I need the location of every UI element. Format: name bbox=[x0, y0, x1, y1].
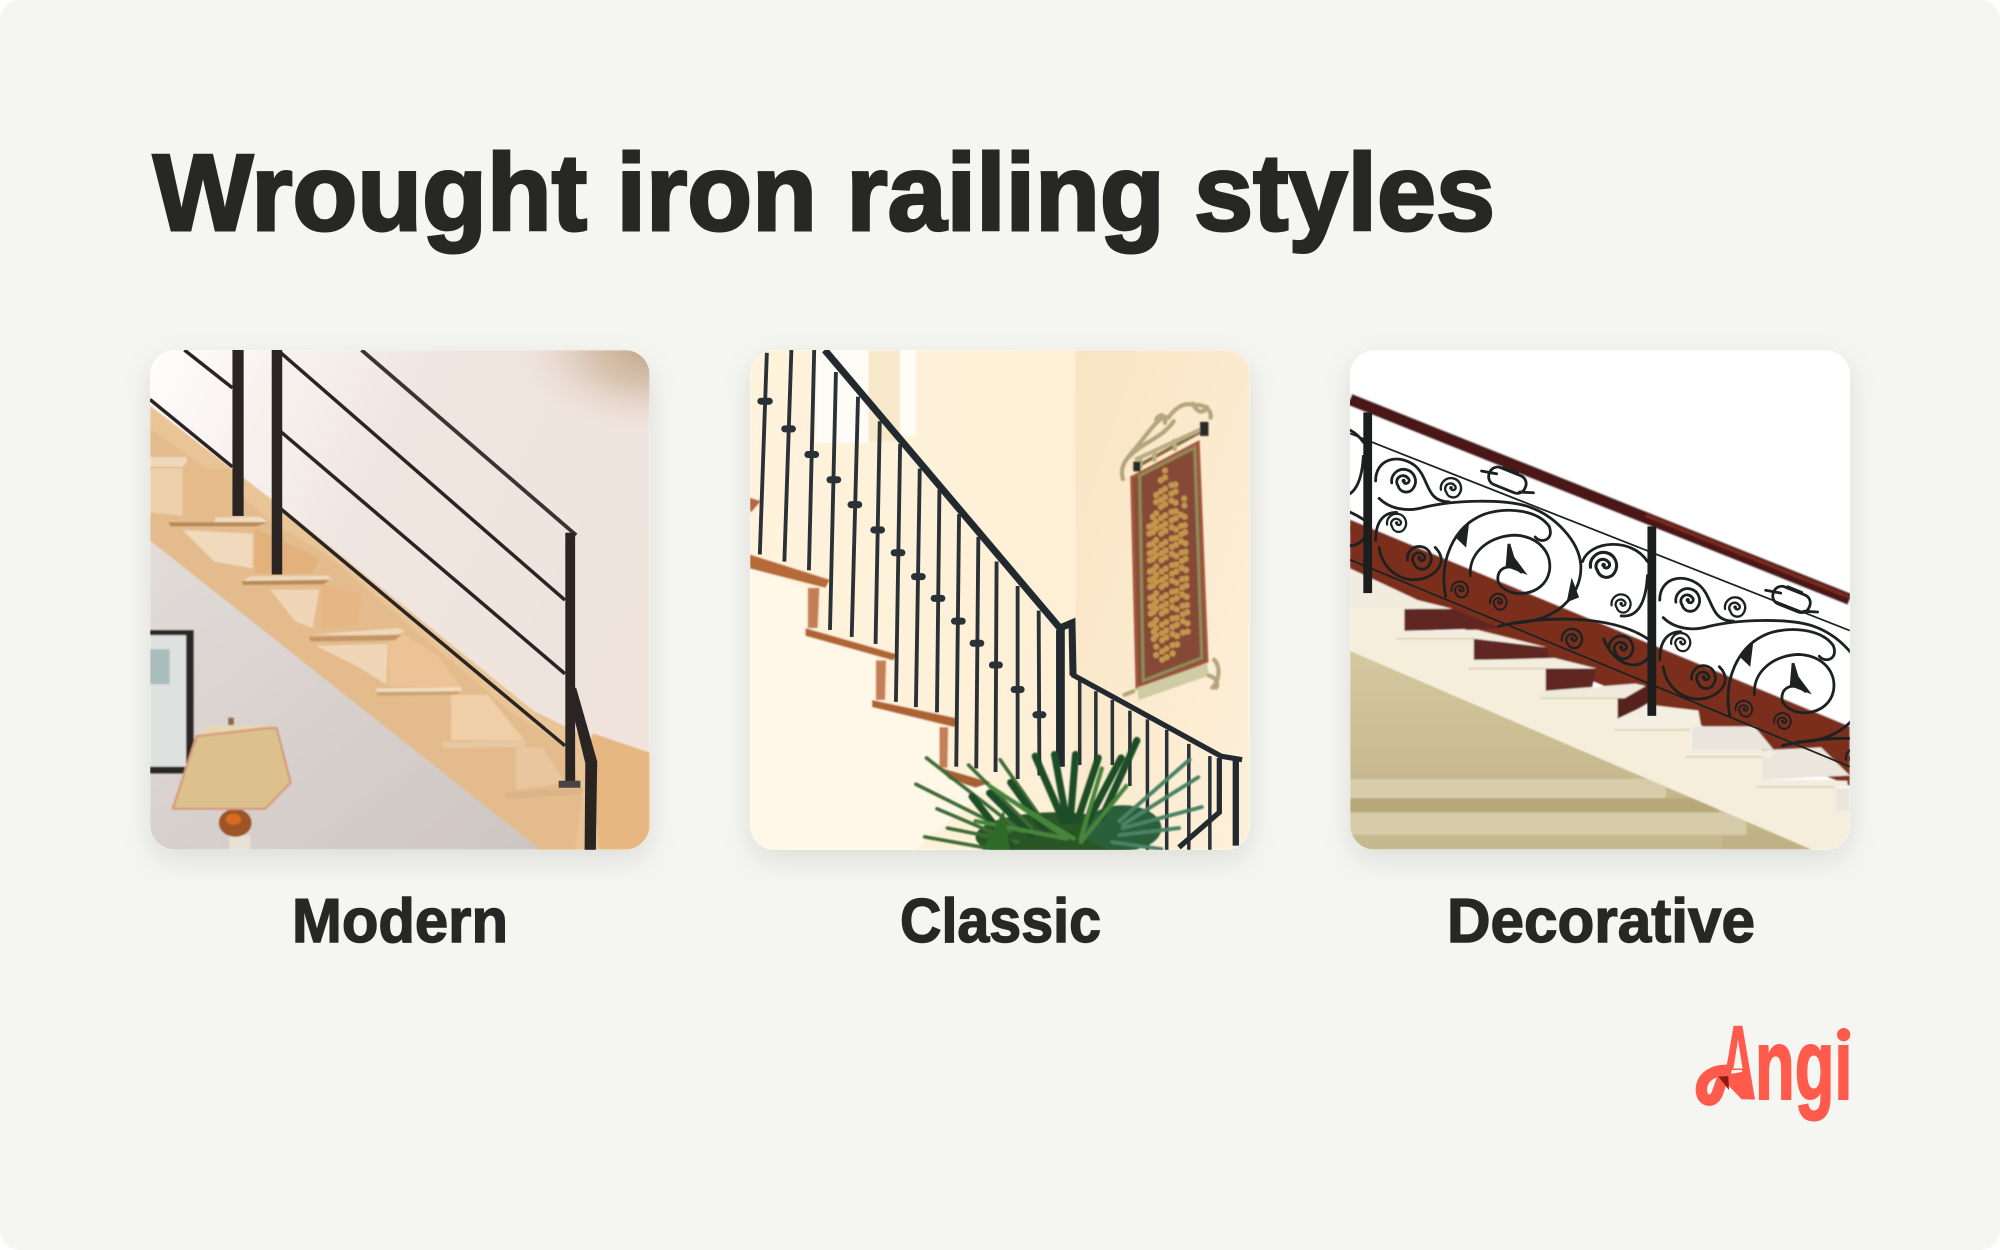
scrollwork bbox=[1350, 412, 1850, 768]
handrail bbox=[825, 350, 1242, 847]
label: Modern: Modern bbox=[292, 887, 508, 956]
lamp bbox=[173, 718, 291, 850]
label: Decorative: Decorative bbox=[1447, 887, 1755, 956]
title: Wrought iron railing styles bbox=[153, 132, 1495, 254]
red wall band bbox=[1350, 519, 1850, 786]
panel: modern railing photo bbox=[150, 350, 650, 850]
handrail bbox=[1350, 399, 1850, 599]
picture frame bbox=[150, 630, 194, 774]
logo: Angi: A bbox=[1720, 1003, 1756, 1122]
balusters bbox=[760, 350, 1210, 850]
wall tapestry bbox=[1122, 404, 1219, 700]
panel: classic railing photo bbox=[750, 350, 1250, 861]
plaster wall and cornice bbox=[1350, 650, 1812, 850]
label: Classic: Classic bbox=[900, 887, 1101, 956]
staircase bbox=[1350, 569, 1850, 850]
potted plant bbox=[916, 740, 1202, 861]
logo: Angi bbox=[1701, 1003, 1856, 1122]
panel: decorative railing photo bbox=[1344, 350, 1856, 866]
logo: Angi: ngi bbox=[1755, 1009, 1852, 1120]
